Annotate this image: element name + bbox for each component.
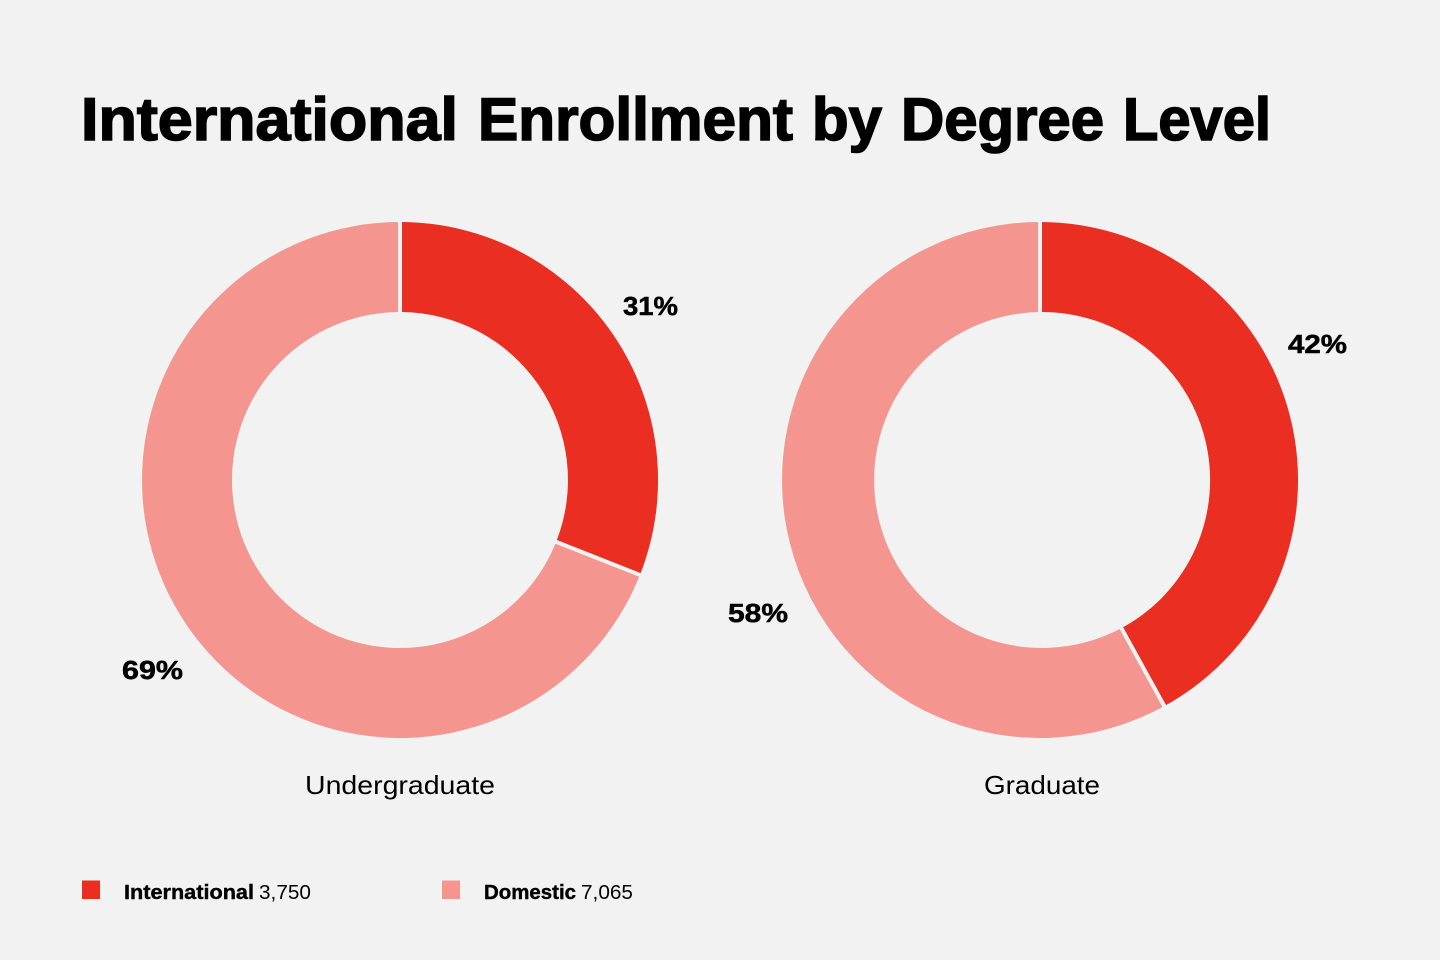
segment: undergraduate international 31% (400, 222, 658, 575)
title: Enrollment (478, 86, 793, 153)
label: Undergraduate: Undergraduate (305, 770, 495, 800)
chart: graduate donut (728, 220, 1347, 800)
label: 58%: 58% (728, 598, 788, 628)
legend value: domestic: 7,065 (581, 882, 633, 904)
swatch: domestic (442, 880, 460, 899)
legend: international (82, 880, 311, 904)
title: International (81, 86, 458, 153)
segment: undergraduate domestic 69% (142, 222, 640, 738)
title: Level (1123, 86, 1271, 153)
label: 31%: 31% (623, 291, 678, 321)
title: Degree (901, 86, 1104, 153)
legend: domestic (442, 880, 633, 904)
chart: undergraduate donut (122, 220, 678, 800)
legend value: international: 3,750 (259, 882, 311, 904)
legend label: international: International (124, 882, 254, 904)
swatch: international (82, 880, 100, 899)
label: 69%: 69% (122, 655, 183, 685)
label: Graduate: Graduate (984, 770, 1100, 800)
label: 42%: 42% (1288, 329, 1347, 359)
legend label: domestic: Domestic (484, 882, 576, 904)
segment: graduate domestic 58% (782, 222, 1164, 738)
segment: graduate international 42% (1040, 222, 1298, 706)
title: by (812, 86, 883, 153)
